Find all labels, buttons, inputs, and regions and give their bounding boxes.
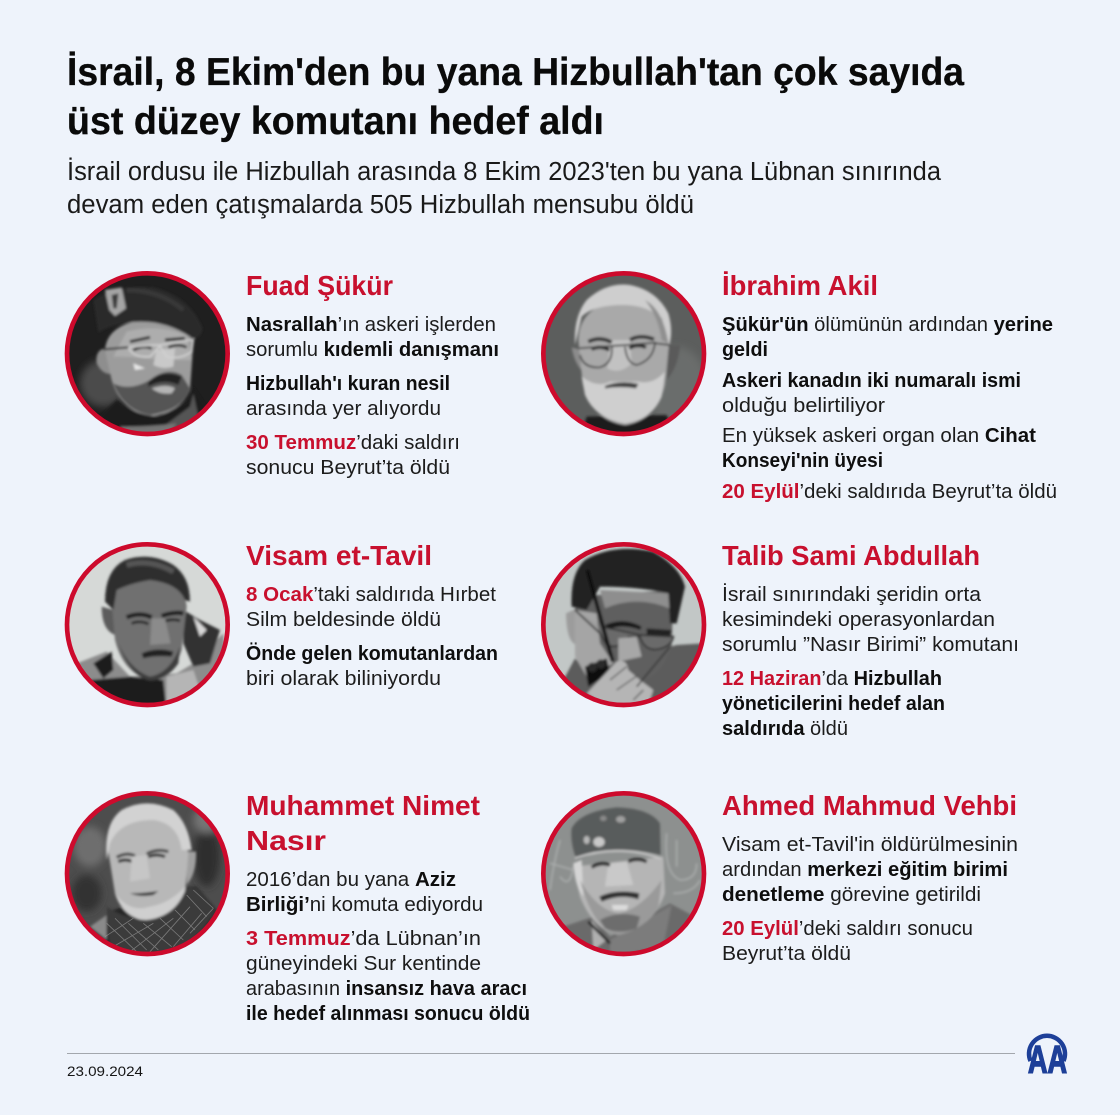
text: biography: Visam et-Tavil'in öldürülmesinin [722, 833, 1018, 856]
text: biography: güneyindeki Sur kentinde [246, 952, 481, 975]
text: biography: denetleme görevine getirildi [722, 883, 981, 906]
panel: Visam et-Tavil [63, 540, 498, 710]
text: biography: kesimindeki operasyonlardan [722, 608, 995, 631]
text: biography: yöneticilerini hedef alan [722, 692, 945, 715]
text: biography: Konseyi'nin üyesi [722, 449, 883, 472]
text: biography: biri olarak biliniyordu [246, 667, 441, 690]
text: biography [722, 313, 1057, 503]
text: biography: ile hedef alınması sonucu öldü [246, 1002, 530, 1025]
portrait: Talib Sami Abdullah [540, 540, 710, 710]
panel: Talib Sami Abdullah [540, 540, 1019, 740]
subtitle: İsrail ordusu ile Hizbullah arasında 8 Ekim 2023'ten bu yana Lübnan sınırında [67, 157, 942, 186]
panel: Fuad Şükür [63, 270, 499, 479]
title: üst düzey komutanı hedef aldı [67, 100, 604, 143]
text: biography: 12 Haziran’da Hizbullah [722, 667, 942, 690]
text: biography: arasında yer alıyordu [246, 397, 441, 420]
logo: AA: AA [1028, 1039, 1067, 1082]
text: biography: Hizbullah'ı kuran nesil [246, 372, 450, 395]
name: Ahmed Mahmud Vehbi [722, 790, 1017, 821]
panel: Muhammet Nimet Nasır [63, 790, 530, 1025]
text: biography: geldi [722, 338, 768, 361]
portrait: Muhammet Nimet Nasır [63, 790, 233, 960]
text: biography: sorumlu ”Nasır Birimi” komutanı [722, 633, 1019, 656]
text: biography: Nasrallah’ın askeri işlerden [246, 313, 496, 336]
name: Talib Sami Abdullah [722, 540, 980, 571]
portrait: Ahmed Mahmud Vehbi [540, 790, 710, 960]
panel: İbrahim Akil [540, 270, 1057, 503]
name: Visam et-Tavil [246, 540, 432, 571]
text: biography [722, 833, 1018, 965]
title: İsrail, 8 Ekim'den bu yana Hizbullah'tan çok sayıda [67, 51, 964, 94]
subtitle [67, 157, 942, 219]
text: biography: Birliği’ni komuta ediyordu [246, 893, 483, 916]
text: biography: 20 Eylül’deki saldırıda Beyrut’ta öldü [722, 480, 1057, 503]
text: biography: sonucu Beyrut’ta öldü [246, 456, 450, 479]
name: Muhammet Nimet [246, 790, 480, 821]
portrait: İbrahim Akil [540, 270, 710, 440]
text: biography: olduğu belirtiliyor [722, 394, 885, 417]
portrait: Visam et-Tavil [63, 540, 233, 710]
panel: Ahmed Mahmud Vehbi [540, 790, 1018, 965]
portrait: Fuad Şükür [63, 270, 233, 440]
text: biography: arabasının insansız hava aracı [246, 977, 527, 1000]
text: biography: Askeri kanadın iki numaralı ismi [722, 369, 1021, 392]
text: biography: ardından merkezi eğitim birimi [722, 858, 1008, 881]
text: biography: 30 Temmuz’daki saldırı [246, 431, 460, 454]
text: biography: Önde gelen komutanlardan [246, 642, 498, 665]
subtitle: devam eden çatışmalarda 505 Hizbullah mensubu öldü [67, 191, 694, 219]
name: İbrahim Akil [722, 270, 878, 301]
name: Fuad Şükür [246, 270, 393, 301]
text: biography [246, 313, 499, 479]
text: biography: 2016’dan bu yana Aziz [246, 868, 456, 891]
name [246, 790, 480, 856]
date: 23.09.2024 [67, 1063, 143, 1079]
text: biography: 8 Ocak’taki saldırıda Hırbet [246, 583, 496, 606]
name: Nasır [246, 825, 326, 856]
text: biography [722, 583, 1019, 740]
text: biography: En yüksek askeri organ olan Cihat [722, 424, 1036, 447]
text: biography: Beyrut’ta öldü [722, 942, 851, 965]
text: biography [246, 583, 498, 690]
text: biography: sorumlu kıdemli danışmanı [246, 338, 499, 361]
text: biography: 20 Eylül’deki saldırı sonucu [722, 917, 973, 940]
text: biography: Şükür'ün ölümünün ardından yerine [722, 313, 1053, 336]
logo: AA [1028, 1036, 1067, 1082]
title [67, 51, 964, 143]
text: biography: İsrail sınırındaki şeridin orta [722, 583, 982, 606]
text: biography: 3 Temmuz ’da Lübnan’ın [246, 927, 481, 950]
text: biography: Silm beldesinde öldü [246, 608, 441, 631]
text: biography: saldırıda öldü [722, 717, 848, 740]
text: biography [246, 868, 530, 1025]
